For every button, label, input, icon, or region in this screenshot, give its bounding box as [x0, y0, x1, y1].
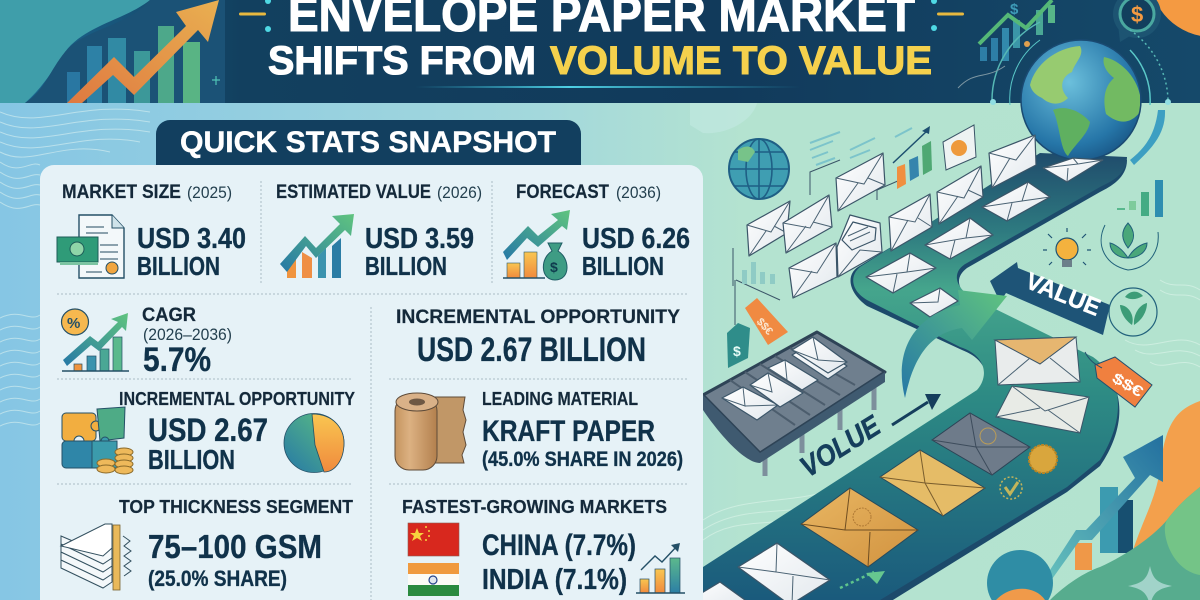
- standing envelopes: [747, 135, 1036, 298]
- stat: forecast: (2036): [616, 183, 661, 202]
- header sparkle accents: [212, 0, 964, 88]
- stat: top thickness: 75–100 GSM: [148, 528, 322, 565]
- stat: market size: MARKET SIZE: [62, 182, 181, 203]
- icon: leaf circle: [1109, 288, 1157, 336]
- stat: incremental opportunity wide: USD 2.67 BILLION: [417, 331, 646, 369]
- hanging price tags: $: [733, 343, 741, 359]
- bottom right orange blob: [1100, 401, 1200, 600]
- stat: forecast: FORECAST: [516, 182, 609, 203]
- title: [268, 0, 932, 83]
- icon: chart with money bag: $: [550, 259, 558, 275]
- header left rising chart: [67, 0, 219, 103]
- bottom right green blobs: [987, 487, 1200, 600]
- stat: fastest growing: CHINA (7.7%): [482, 529, 636, 562]
- white envelope: [738, 543, 830, 600]
- stat: market size: BILLION: [137, 251, 220, 281]
- stat: CAGR: CAGR: [142, 305, 196, 326]
- header right orange circle: [1150, 0, 1200, 37]
- icon: plant sprout: [1101, 223, 1158, 270]
- header left blob dark: [25, 0, 225, 103]
- stat: leading material: (45.0% SHARE IN 2026): [482, 448, 683, 471]
- stat: CAGR: 5.7%: [143, 341, 211, 379]
- envelope 5: [789, 243, 837, 298]
- section heading: quick stats: QUICK STATS SNAPSHOT: [180, 126, 556, 159]
- icon: puzzle and coins: [62, 407, 133, 474]
- road ribbon: [680, 153, 1127, 600]
- stat: incremental opportunity puzzle: [62, 389, 355, 475]
- envelope 3: [836, 153, 885, 211]
- stat: estimated value: BILLION: [365, 251, 447, 281]
- cream envelope lower: [996, 386, 1089, 433]
- envelope open: [837, 215, 882, 277]
- title: VOLUME TO VALUE: [550, 39, 932, 83]
- road small arrow: [840, 571, 885, 588]
- VOLUE label with arrow: VOLUE: [795, 409, 888, 484]
- flat envelopes on road: [866, 158, 1103, 317]
- decorative waves: [0, 103, 1200, 540]
- globe with orbit rings: [958, 22, 1171, 160]
- icon: lightbulb: [1043, 228, 1091, 267]
- title: SHIFTS FROM: [268, 39, 536, 83]
- envelope 7: [937, 166, 983, 224]
- stat: fastest growing: [402, 497, 685, 596]
- stat: market size: USD 3.40: [137, 223, 246, 255]
- stat: incremental opportunity puzzle: INCREMENTAL OPPORTUNITY: [119, 389, 355, 409]
- premium envelopes: [690, 337, 1089, 600]
- conveyor envelopes: [722, 337, 847, 420]
- icon: document with cash: [57, 215, 124, 278]
- hanging price tags: $$€: [754, 316, 775, 338]
- sparkle star: [1128, 566, 1172, 600]
- stat: leading material: KRAFT PAPER: [482, 415, 655, 448]
- stat: market size: [57, 182, 246, 281]
- icon: paper stack with ruler: [61, 524, 131, 590]
- bottom right rising arrow: [1037, 435, 1163, 593]
- envelope 1: [747, 201, 790, 256]
- icon card: [943, 125, 976, 170]
- stat: estimated value: ESTIMATED VALUE: [276, 182, 431, 203]
- icon: percent chart: %: [67, 315, 80, 332]
- stat: CAGR: [62, 305, 232, 379]
- price tag: [1085, 352, 1152, 407]
- wax seals: [1000, 445, 1057, 499]
- flat envelope 4: [866, 253, 936, 293]
- stat: fastest growing: FASTEST-GROWING MARKETS: [402, 497, 667, 517]
- orange-gold envelope: [801, 488, 918, 567]
- stat: top thickness: TOP THICKNESS SEGMENT: [119, 497, 353, 517]
- mini green bars: [1117, 180, 1163, 217]
- conveyor belt: [703, 332, 885, 476]
- icon: flag of India: [408, 563, 459, 596]
- header left blob: [0, 0, 150, 103]
- VALUE arrow banner: VALUE: [1022, 268, 1104, 322]
- stat: top thickness: (25.0% SHARE): [148, 566, 287, 591]
- cream envelope with tan flap: [995, 337, 1080, 385]
- icon: mini growth chart: [636, 543, 685, 593]
- stat: leading material: LEADING MATERIAL: [482, 389, 638, 409]
- flat envelope 5: [910, 288, 958, 317]
- icon: rising chart: [280, 214, 354, 278]
- header right chart: [979, 0, 1055, 61]
- stat: incremental opportunity puzzle: BILLION: [148, 444, 235, 475]
- pie chart: [284, 414, 344, 472]
- stat: incremental opportunity wide: INCREMENTAL OPPORTUNITY: [396, 307, 680, 328]
- small bar chart with arrow: [893, 126, 932, 189]
- hanging price tags: [727, 248, 788, 368]
- icon: flag of China: [408, 523, 459, 556]
- stat: estimated value: USD 3.59: [365, 223, 474, 255]
- icon: dollar bubble: $: [1131, 2, 1143, 27]
- flat envelope 2: [982, 182, 1050, 221]
- stat: estimated value: [276, 182, 482, 281]
- right blue ribbon: [1130, 110, 1165, 165]
- stat: CAGR: (2026–2036): [143, 325, 232, 344]
- stat: top thickness: [61, 497, 353, 591]
- stat: estimated value: (2026): [437, 183, 482, 202]
- envelope 6: [889, 194, 932, 251]
- stat: market size: (2025): [187, 183, 232, 202]
- white envelope corner: [690, 582, 745, 600]
- gold envelope: [880, 450, 985, 516]
- icon: kraft paper roll: [395, 393, 466, 470]
- flat envelope 3: [925, 218, 993, 259]
- icon: chart with money bag: [503, 210, 570, 280]
- curved transition arrow: [902, 290, 1007, 398]
- icon: small globe: [729, 139, 789, 199]
- envelope 8: [989, 135, 1036, 188]
- price tag: $$€: [1109, 370, 1147, 401]
- header right chart: $: [1010, 1, 1019, 18]
- stat: incremental opportunity puzzle: USD 2.67: [148, 412, 268, 448]
- stat: forecast: [503, 182, 690, 281]
- section heading: quick stats: [156, 120, 581, 180]
- mini text lines: [810, 128, 912, 200]
- flat envelope 1: [1043, 158, 1103, 182]
- small bars left of tags: [742, 262, 775, 284]
- VALUE arrow banner: [990, 262, 1110, 335]
- icon: dollar bubble: [1113, 0, 1161, 42]
- icon: percent chart: [62, 309, 129, 371]
- stat: incremental opportunity wide: [396, 307, 680, 369]
- header banner: [0, 0, 1200, 103]
- envelope 2: [783, 195, 832, 253]
- stat: leading material: [395, 389, 683, 471]
- gray envelope: [932, 413, 1030, 475]
- stat: forecast: BILLION: [582, 251, 664, 281]
- VOLUE label with arrow: [795, 394, 941, 484]
- stat: fastest growing: INDIA (7.1%): [482, 564, 627, 596]
- stat: forecast: USD 6.26: [582, 223, 690, 255]
- panel: stats card: [40, 165, 703, 600]
